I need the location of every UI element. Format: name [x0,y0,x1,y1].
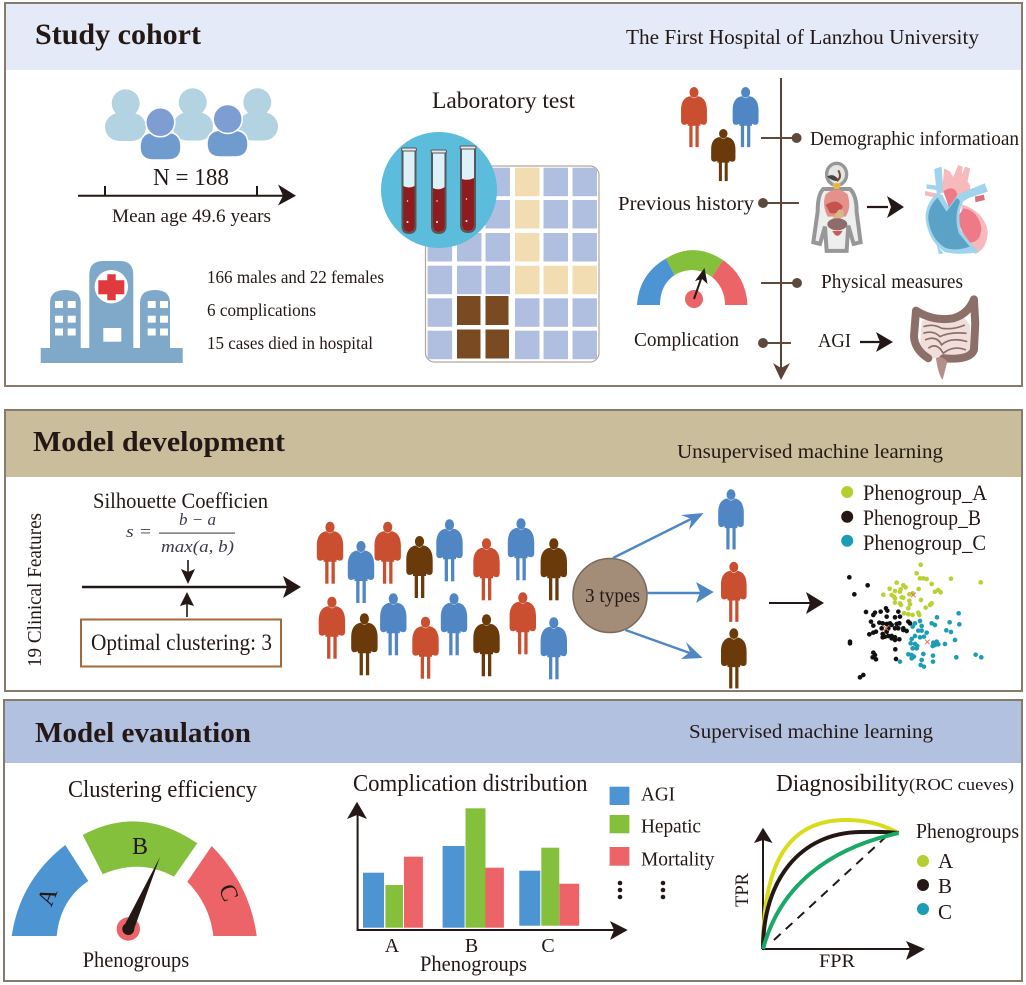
icon: three phenotype patients [718,489,747,688]
legend: complications: Mortality [641,849,714,871]
legend: phenogroups: Phenogroup_B [863,505,981,530]
arrows: to three types [613,513,714,659]
heading: diagnosibility: Diagnosibility [776,771,909,797]
arrow: clustering up [180,592,194,617]
box: optimal clustering: Optimal clustering: 3 [91,630,272,655]
text: cohort facts: 6 complications [207,300,316,320]
formula: silhouette: max(a, b) [161,537,234,556]
label: demographic information: Demographic informatioan [810,128,1019,150]
legend: ROC phenogroups: B [938,874,952,898]
panel: model development [5,410,1022,691]
legend: phenogroups: Phenogroup_A [863,480,987,505]
label: AGI: AGI [818,330,851,352]
formula: silhouette: s = [126,522,152,541]
heading: clustering efficiency: Clustering efficiency [68,777,257,803]
chart: gauge [12,821,257,941]
heading: complication distribution: Complication distribution [353,771,588,797]
chart: laboratory grid [426,166,599,362]
heading: model development: Model development [33,426,285,458]
chart: gauge: B [132,834,148,860]
text: cohort facts [207,267,384,353]
legend: phenogroups [841,480,987,555]
box: optimal clustering [81,620,281,666]
heading: laboratory test: Laboratory test [432,88,575,114]
icon: small gauge [637,250,748,308]
chart: grouped bars [347,802,628,957]
label: silhouette coefficient: Silhouette Coefficien [93,488,268,513]
heading: diagnosibility [776,771,1014,797]
icon: blood test tubes [381,132,497,248]
legend: ROC phenogroups: A [938,849,954,873]
heading: hospital name: The First Hospital of Lanzhou University [626,25,979,49]
heading: model evaluation: Model evaulation [35,717,251,749]
icon: three patients [681,87,759,181]
legend: phenogroups: Phenogroup_C [863,530,986,555]
chart: gauge: A [33,883,64,910]
arrow: AGI to intestine [860,332,893,352]
heading: study cohort: Study cohort [35,18,201,51]
chart: gauge: C [213,881,243,905]
text: mean age: Mean age 49.6 years [112,206,271,227]
icon: hospital [41,261,183,363]
text: cohort facts: 166 males and 22 females [207,267,384,287]
chart: ROC curves [732,820,925,972]
icon: intestine [914,299,975,380]
legend: complications: Hepatic [641,816,701,838]
legend: complications: AGI [641,784,675,806]
panel: study cohort [5,3,1022,386]
chart: grouped bars: A [385,935,400,957]
icon: human body organs [813,163,861,251]
text: cohort facts: 15 cases died in hospital [207,333,373,353]
arrow: main flow [82,576,301,598]
arrow: timeline [758,78,802,380]
node: 3 types: 3 types [585,585,640,607]
chart: grouped bars: C [541,935,555,957]
label: previous history: Previous history [618,193,755,215]
legend: ROC phenogroups: C [938,900,952,924]
node: 3 types [573,558,647,632]
arrow: to scatter [769,592,824,614]
icon: patient crowd [317,518,567,679]
label: phenogroups bars: Phenogroups [420,951,527,976]
formula: silhouette: b − a [179,510,216,529]
panel: model evaluation [4,700,1022,981]
arrow: body to heart [867,196,904,218]
label: complication: Complication [634,329,739,351]
arrow: age axis [78,184,296,206]
chart: grouped bars: B [465,935,478,957]
heading: unsupervised machine learning: Unsupervised machine learning [677,441,943,463]
legend: complications [610,784,714,899]
legend: ROC phenogroups: Phenogroups [916,819,1019,843]
icon: heart [925,165,988,254]
chart: ROC curves: FPR [819,951,855,972]
label: 19 clinical features: 19 Clinical Features [24,513,46,667]
icon: group of people [105,88,278,160]
legend: ROC phenogroups [916,819,1019,924]
formula: silhouette [126,510,235,556]
heading: diagnosibility: (ROC cueves) [909,775,1014,794]
heading: supervised machine learning: Supervised machine learning [689,721,933,743]
label: phenogroups gauge: Phenogroups [83,947,189,972]
chart: ROC curves: TPR [732,873,753,907]
label: physical measures: Physical measures [821,271,963,293]
arrow: formula down [181,560,195,584]
chart: cluster scatter [849,565,981,677]
text: N = 188: N = 188 [153,165,229,191]
